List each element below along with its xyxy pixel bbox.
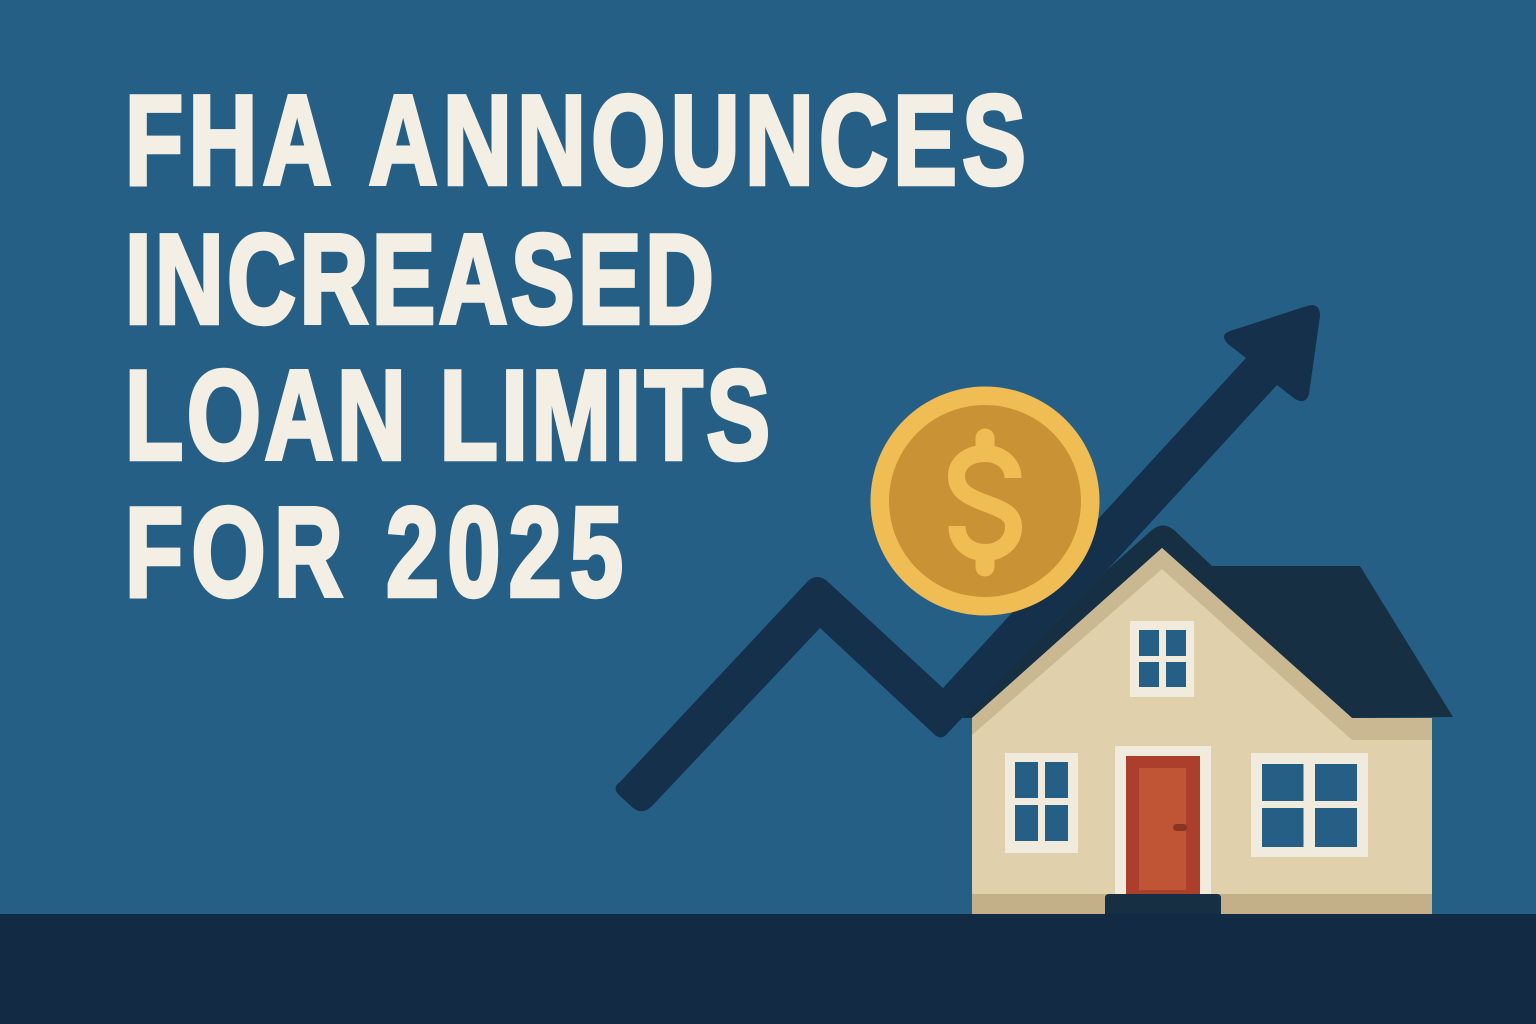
ground [0, 914, 1536, 1024]
right window [1251, 753, 1368, 857]
doorstep [1105, 894, 1221, 914]
door [1115, 746, 1211, 894]
coin [870, 386, 1100, 616]
trim under roof [972, 548, 1432, 740]
foundation [972, 894, 1432, 914]
left window [1005, 753, 1078, 853]
attic window [1130, 621, 1194, 697]
rising arrow [616, 305, 1320, 811]
icon: dollar sign [956, 438, 1014, 567]
roof [962, 526, 1453, 718]
house [962, 526, 1453, 914]
title: LOAN LIMITS [125, 344, 770, 486]
title: INCREASED [125, 208, 714, 350]
title: FHA ANNOUNCES [125, 69, 1026, 211]
title: FOR 2025 [125, 481, 623, 623]
title [125, 69, 1026, 623]
house body [972, 548, 1432, 914]
